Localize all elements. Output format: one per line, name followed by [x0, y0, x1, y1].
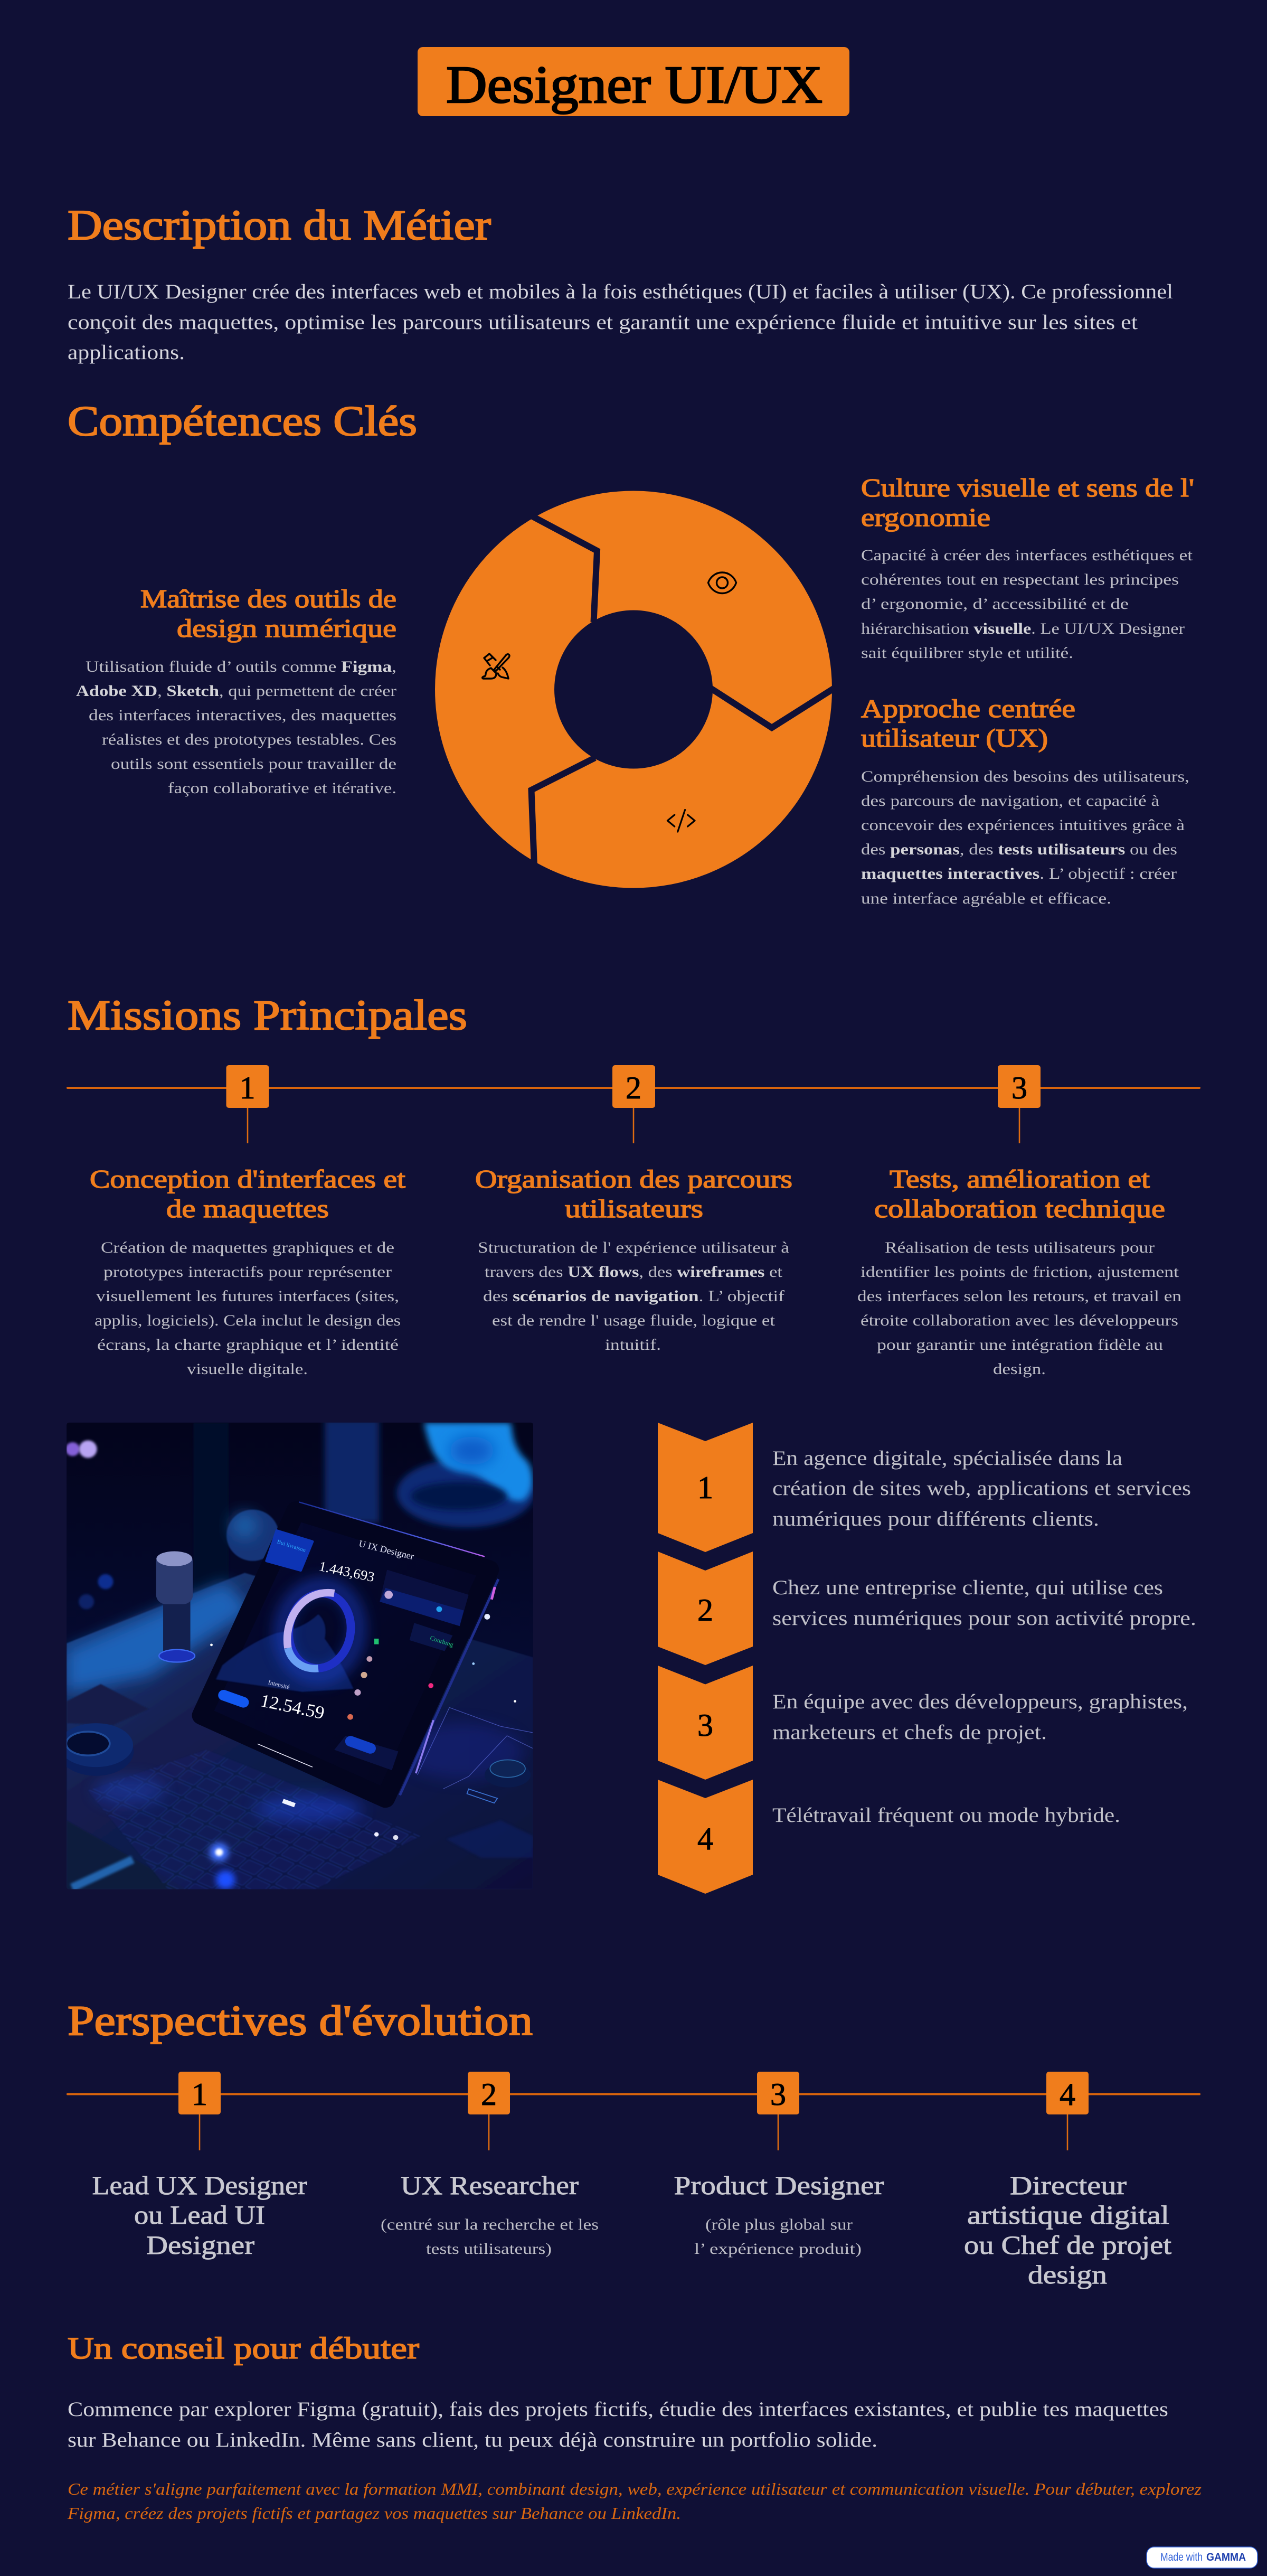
image: tablet UX dashboard on a desk: Courbing: [429, 1634, 455, 1648]
career: UX researcher: UX Researcher: [401, 2170, 579, 2200]
mission 3: collaboration technique: [874, 1194, 1165, 1223]
competence: approche centrée utilisateur: une interface agréable et efficace.: [861, 890, 1111, 907]
mission 1: de maquettes: [166, 1194, 329, 1223]
donut chart: [483, 515, 835, 866]
chevron step 3: marketeurs et chefs de projet.: [772, 1721, 1047, 1744]
mission 3: identifier les points de friction, ajustement: [861, 1263, 1179, 1281]
heading: conseil: Un conseil pour débuter: [68, 2331, 419, 2365]
closing note: Ce métier s'aligne parfaitement avec la formation MMI, combinant design, web, expérience utilisateur et communication visuelle. Pour débuter, explorez: [68, 2479, 1202, 2498]
mission 2: Structuration de l' expérience utilisateur à: [478, 1239, 789, 1256]
competence: maîtrise des outils: Adobe XD , Sketch , qui permettent de créer: [76, 682, 396, 700]
mission 2: [475, 1164, 792, 1353]
chevron step 1: création de sites web, applications et services: [772, 1477, 1191, 1500]
section: missions principales: [68, 992, 1199, 1378]
text block: conseil: [68, 2398, 1168, 2451]
timeline: perspectives: 4: [1060, 2077, 1075, 2112]
chevron step 2: services numériques pour son activité propre.: [772, 1607, 1196, 1630]
career: directeur artistique: Directeur: [1010, 2170, 1127, 2200]
mission 2: Organisation des parcours: [475, 1164, 792, 1193]
text block: conseil: sur Behance ou LinkedIn. Même sans client, tu peux déjà construire un portfolio solide.: [68, 2429, 877, 2451]
career: lead designer: ou Lead UI: [134, 2200, 265, 2230]
timeline: missions: [68, 1065, 1199, 1143]
chevron step 3: 3: [697, 1708, 713, 1743]
text block: description: [68, 280, 1173, 364]
competence: approche centrée utilisateur: Compréhension des besoins des utilisateurs,: [861, 768, 1189, 785]
chevron step 2: 2: [697, 1593, 713, 1628]
career: lead designer: Lead UX Designer: [92, 2170, 307, 2200]
competence: culture visuelle: Culture visuelle et sens de l': [861, 473, 1194, 502]
mission 1: [90, 1164, 405, 1378]
competence: culture visuelle: ergonomie: [861, 503, 990, 532]
mission 3: pour garantir une intégration fidèle au: [877, 1336, 1163, 1353]
badge: made with gamma: Made with: [1160, 2551, 1203, 2563]
competence: culture visuelle: [861, 473, 1194, 662]
chevron list: work environments: [658, 1423, 1196, 1894]
chevron step 4: [658, 1780, 1120, 1894]
mission 3: design.: [993, 1360, 1046, 1378]
competence: culture visuelle: cohérentes tout en respectant les principes: [861, 571, 1179, 588]
timeline: perspectives: 2: [481, 2077, 497, 2112]
section: perspectives d'évolution: [68, 1998, 1199, 2289]
tablet screen text: U IX Designer: [358, 1538, 415, 1562]
chevron step 1: [658, 1423, 1191, 1552]
career: UX researcher: (centré sur la recherche et les: [381, 2216, 599, 2233]
career: directeur artistique: design: [1028, 2260, 1107, 2289]
section: un conseil pour débuter: [67, 2331, 1202, 2523]
career: product designer: [674, 2170, 884, 2258]
image: tablet UX dashboard on a desk: [58, 1419, 534, 1889]
competence: maîtrise des outils: Utilisation fluide d’ outils comme Figma ,: [86, 658, 396, 675]
career: product designer: (rôle plus global sur: [705, 2216, 853, 2233]
mission 1: applis, logiciels). Cela inclut le design des: [94, 1312, 401, 1329]
career: directeur artistique: artistique digital: [967, 2200, 1169, 2230]
heading: description: Description du Métier: [68, 202, 491, 249]
heading: missions: Missions Principales: [68, 992, 467, 1039]
chevron step 3: [658, 1666, 1188, 1780]
heading: compétences: Compétences Clés: [68, 398, 417, 445]
competence: approche centrée utilisateur: utilisateur (UX): [861, 723, 1048, 753]
timeline: perspectives: 1: [192, 2077, 207, 2112]
competence: approche centrée utilisateur: des parcours de navigation, et capacité à: [861, 792, 1159, 810]
timeline: perspectives: [68, 2072, 1199, 2150]
career: directeur artistique: [964, 2170, 1171, 2289]
competence: approche centrée utilisateur: des personas , des tests utilisateurs ou des: [861, 841, 1177, 858]
competence: culture visuelle: Capacité à créer des interfaces esthétiques et: [861, 547, 1193, 564]
chevron step 1: 1: [697, 1470, 713, 1505]
timeline: perspectives: 3: [770, 2077, 786, 2112]
image: tablet UX dashboard on a desk: Intensité: [267, 1678, 290, 1691]
mission 2: est de rendre l' usage fluide, logique et: [492, 1312, 776, 1329]
icon: code: [667, 810, 695, 832]
mission 3: des interfaces selon les retours, et travail en: [857, 1287, 1181, 1305]
competence: maîtrise des outils: [76, 584, 396, 797]
badge: made with gamma: GAMMA: [1206, 2551, 1246, 2563]
competence: approche centrée utilisateur: concevoir des expériences intuitives grâce à: [861, 816, 1185, 834]
icon: design tools: [483, 654, 509, 679]
closing note: [67, 2479, 1202, 2523]
competence: maîtrise des outils: design numérique: [177, 614, 396, 643]
career: directeur artistique: ou Chef de projet: [964, 2230, 1171, 2260]
competence: maîtrise des outils: outils sont essentiels pour travailler de: [111, 755, 396, 773]
competence: approche centrée utilisateur: Approche centrée: [861, 694, 1075, 723]
mission 3: Réalisation de tests utilisateurs pour: [885, 1239, 1155, 1256]
badge: made with gamma: [1147, 2547, 1257, 2568]
career: UX researcher: [381, 2170, 599, 2258]
image: tablet UX dashboard on a desk: 1.443,693: [318, 1558, 376, 1585]
competence: maîtrise des outils: des interfaces interactives, des maquettes: [89, 707, 396, 724]
closing note: Figma, créez des projets fictifs et partagez vos maquettes sur Behance ou LinkedIn.: [67, 2504, 681, 2523]
competence: maîtrise des outils: Maîtrise des outils de: [140, 584, 396, 613]
text block: conseil: Commence par explorer Figma (gratuit), fais des projets fictifs, étudie des interfaces existantes, et publie tes maquettes: [68, 2398, 1168, 2421]
timeline: missions: 3: [1011, 1070, 1027, 1105]
mission 2: des scénarios de navigation . L’ objectif: [483, 1287, 784, 1305]
timeline: missions: 2: [626, 1070, 641, 1105]
chevron step 1: En agence digitale, spécialisée dans la: [772, 1447, 1122, 1470]
mission 1: visuellement les futures interfaces (sites,: [96, 1287, 399, 1305]
competence: approche centrée utilisateur: [861, 694, 1189, 907]
career: product designer: l’ expérience produit): [694, 2240, 862, 2258]
competence: approche centrée utilisateur: maquettes interactives . L’ objectif : créer: [861, 865, 1177, 882]
competence: maîtrise des outils: façon collaborative et itérative.: [168, 779, 396, 797]
mission 3: Tests, amélioration et: [890, 1164, 1150, 1193]
chevron step 3: En équipe avec des développeurs, graphistes,: [772, 1690, 1188, 1713]
career: lead designer: Designer: [146, 2230, 254, 2260]
image: tablet UX dashboard on a desk: Bui livraison: [276, 1539, 307, 1554]
competence: culture visuelle: d’ ergonomie, d’ accessibilité et de: [861, 595, 1129, 613]
competence: culture visuelle: hiérarchisation visuelle . Le UI/UX Designer: [861, 620, 1185, 637]
text block: description: Le UI/UX Designer crée des interfaces web et mobiles à la fois esthétiques (UI) et faciles à utiliser (UX). Ce professionnel: [68, 280, 1173, 303]
competence: maîtrise des outils: réalistes et des prototypes testables. Ces: [102, 731, 396, 748]
mission 2: utilisateurs: [565, 1194, 703, 1223]
mission 1: Création de maquettes graphiques et de: [101, 1239, 394, 1256]
chevron step 4: Télétravail fréquent ou mode hybride.: [772, 1804, 1120, 1827]
chevron step 4: 4: [697, 1821, 713, 1856]
competence: culture visuelle: sait équilibrer style et utilité.: [861, 644, 1073, 662]
chevron step 2: [658, 1552, 1196, 1665]
title banner: Designer UI/UX: [446, 55, 822, 114]
mission 2: travers des UX flows , des wireframes et: [485, 1263, 783, 1281]
mission 1: prototypes interactifs pour représenter: [103, 1263, 392, 1281]
chevron step 1: numériques pour différents clients.: [772, 1508, 1099, 1530]
image: tablet UX dashboard on a desk: 12.54.59: [259, 1690, 326, 1723]
chevron step 2: Chez une entreprise cliente, qui utilise ces: [772, 1576, 1163, 1599]
heading: perspectives: Perspectives d'évolution: [68, 1998, 533, 2044]
tablet body: [202, 1511, 489, 1798]
desk highlights: [418, 1707, 533, 1775]
section: compétences clés: [68, 398, 1194, 907]
career: product designer: Product Designer: [674, 2170, 884, 2200]
mission 1: écrans, la charte graphique et l’ identité: [97, 1336, 399, 1353]
timeline: missions: 1: [240, 1070, 256, 1105]
mission 2: intuitif.: [605, 1336, 661, 1353]
mission 1: visuelle digitale.: [187, 1360, 308, 1378]
text block: description: conçoit des maquettes, optimise les parcours utilisateurs et garantit une expérience fluide et intuitive sur les sites et: [68, 311, 1138, 334]
mission 3: étroite collaboration avec les développeurs: [861, 1312, 1178, 1329]
section: description du métier: [68, 202, 1173, 364]
career: lead designer: [92, 2170, 307, 2260]
text block: description: applications.: [68, 341, 185, 364]
mission 1: Conception d'interfaces et: [90, 1164, 405, 1193]
mission 3: [857, 1164, 1181, 1378]
icon: eye: [708, 572, 736, 594]
career: UX researcher: tests utilisateurs): [426, 2240, 552, 2258]
